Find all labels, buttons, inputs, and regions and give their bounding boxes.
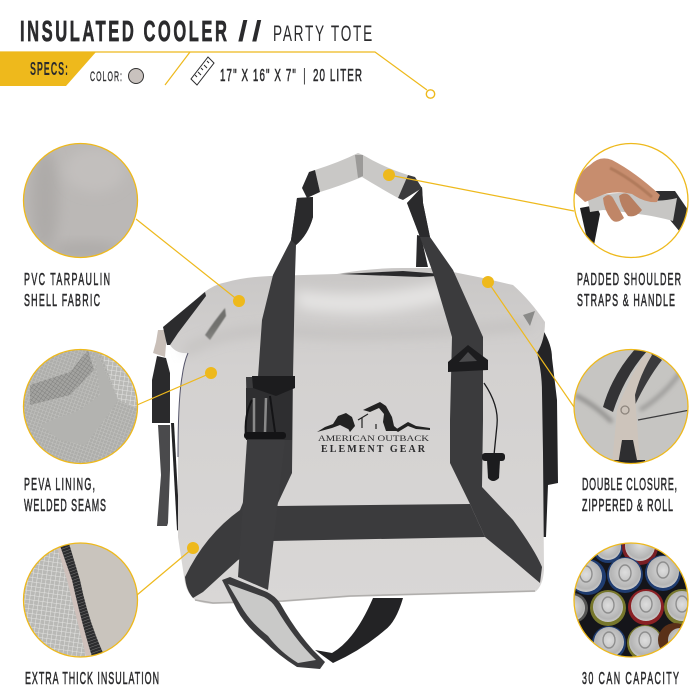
label: padded straps: PADDED SHOULDER bbox=[577, 269, 681, 289]
logo bbox=[317, 402, 430, 455]
dimensions: 20 LITER bbox=[313, 66, 362, 86]
bag body bbox=[170, 268, 545, 604]
shoulder pad bbox=[222, 577, 325, 669]
icon: ruler bbox=[191, 57, 214, 85]
body shading bbox=[178, 271, 535, 603]
header rule with end marker bbox=[0, 52, 435, 98]
dimensions: 17" X 16" X 7" bbox=[220, 66, 296, 86]
left webbing strap bbox=[185, 197, 313, 598]
color swatch: COLOR: bbox=[90, 70, 122, 85]
title: PARTY TOTE bbox=[273, 21, 372, 46]
specs banner bbox=[0, 52, 96, 86]
title bbox=[20, 15, 372, 48]
label: PVC tarpaulin: PVC TARPAULIN bbox=[24, 269, 110, 289]
label: PVC tarpaulin bbox=[24, 269, 110, 310]
bottom webbing band bbox=[272, 504, 485, 541]
detail: handle in hand bbox=[570, 140, 692, 262]
label: can capacity: 30 CAN CAPACITY bbox=[582, 668, 679, 688]
label: PEVA lining: WELDED SEAMS bbox=[24, 495, 106, 515]
right side strap bbox=[536, 330, 558, 537]
product: cooler bag bbox=[152, 153, 558, 669]
callout lines and dots bbox=[136, 169, 574, 595]
label: PEVA lining: PEVA LINING, bbox=[24, 474, 95, 494]
front buckles and cords bbox=[244, 345, 505, 481]
roll-top strap bbox=[163, 292, 206, 345]
detail: PVC tarpaulin bbox=[20, 140, 142, 262]
logo: ELEMENT GEAR bbox=[321, 444, 426, 455]
label: PEVA lining bbox=[24, 474, 106, 515]
label: padded straps bbox=[577, 269, 681, 310]
color swatch bbox=[90, 68, 144, 85]
left side strap and buckle bbox=[152, 330, 180, 532]
rear shoulder strap bbox=[315, 598, 403, 663]
dimensions: | bbox=[303, 66, 306, 86]
dimensions bbox=[220, 66, 362, 86]
label: double closure bbox=[582, 474, 677, 515]
title: // bbox=[238, 15, 266, 47]
detail: insulation bbox=[20, 540, 142, 662]
label: PVC tarpaulin: SHELL FABRIC bbox=[24, 290, 100, 310]
label: padded straps: STRAPS & HANDLE bbox=[577, 290, 675, 310]
right webbing strap bbox=[407, 187, 542, 583]
hanging shoulder strap bbox=[238, 440, 285, 590]
title: INSULATED COOLER bbox=[20, 16, 227, 48]
detail: cans bbox=[573, 542, 689, 658]
label: double closure: DOUBLE CLOSURE, bbox=[582, 474, 677, 494]
detail: zipper closure bbox=[573, 348, 689, 464]
label: insulation: EXTRA THICK INSULATION bbox=[25, 668, 159, 688]
carry handle bbox=[302, 153, 422, 200]
logo: AMERICAN OUTBACK bbox=[318, 433, 430, 443]
label: double closure: ZIPPERED & ROLL bbox=[582, 495, 673, 515]
specs banner: SPECS: bbox=[30, 60, 68, 80]
detail: PEVA lining bbox=[22, 348, 138, 464]
rear handle webbing bbox=[416, 235, 428, 267]
